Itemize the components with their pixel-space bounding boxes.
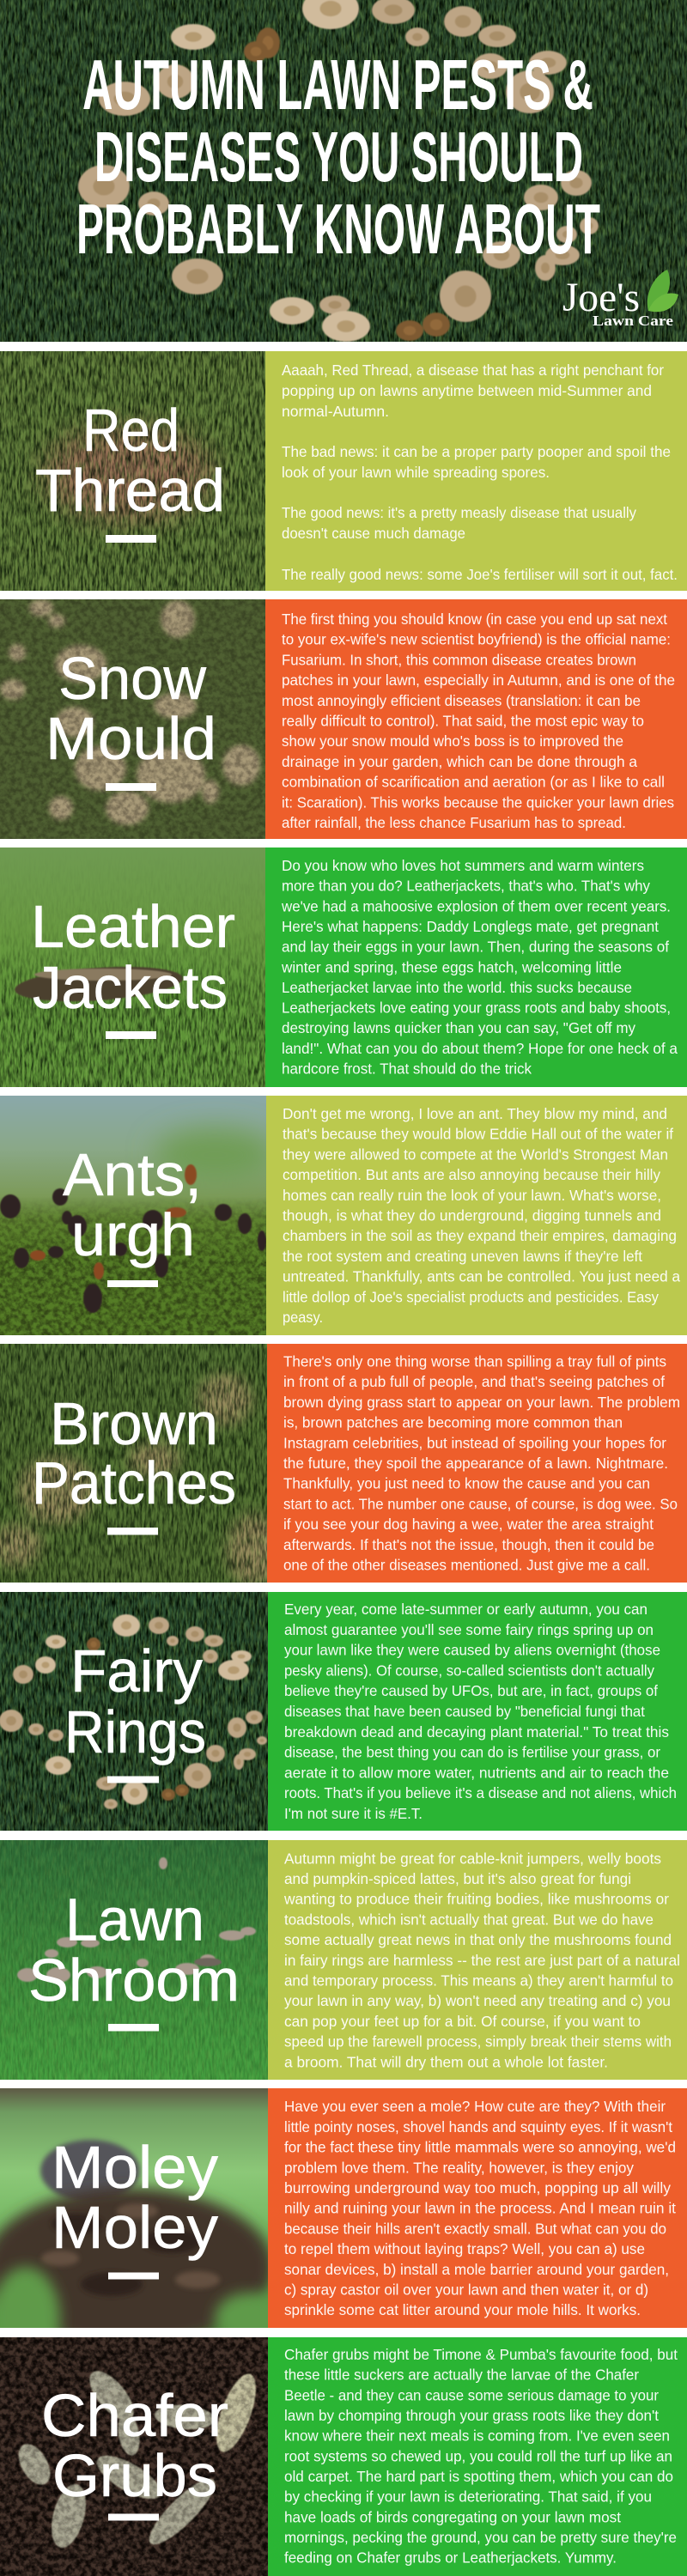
title: Red Thread: Thread — [35, 457, 225, 524]
text panel: most annoyingly efficient diseases (translation: it can be — [282, 692, 641, 709]
text panel: some actually great news in that only the mushrooms found — [284, 1931, 672, 1948]
text panel: Fusarium. In short, this common disease creates brown — [282, 651, 636, 668]
text panel: your lawn like they were caused by aliens overnight (those — [284, 1642, 660, 1659]
text panel: have loads of birds congregating on your lawn most — [284, 2508, 621, 2525]
title: Chafer Grubs — [41, 2382, 228, 2509]
text panel: c) spray castor oil over your lawn and then water it, or d) — [284, 2281, 648, 2298]
text panel: in front of a pub full of people, and that's seeing patches of — [283, 1373, 665, 1390]
title underline bar — [108, 2514, 159, 2521]
text panel — [268, 2337, 687, 2576]
text panel: mornings, pecking the ground, you can be pretty sure they're — [284, 2529, 677, 2546]
title underline bar — [108, 2024, 159, 2032]
text panel: to your ex-wife's new scientist boyfriend) is the official name: — [282, 631, 671, 648]
text panel: diseases that have been caused by "beneficial fungi that — [284, 1703, 645, 1720]
title: Ants, urgh: Ants, — [63, 1141, 202, 1208]
text panel: lawn by chomping through your grass roots like they don't — [284, 2407, 659, 2424]
text panel: show your snow mould who's boss is to improved the — [282, 732, 623, 750]
text panel: more than you do? Leatherjackets, that's who. That's why — [282, 878, 650, 895]
title: Leather Jackets: Jackets — [33, 954, 228, 1021]
title: Snow Mould — [46, 645, 216, 772]
text panel: by checking if your lawn is deteriorating. That said, if you — [284, 2488, 652, 2506]
text panel: pesky aliens). Of course, so-called scientists don't actually — [284, 1662, 654, 1679]
text panel: Leatherjackets love eating your grass roots and baby shoots, — [282, 999, 671, 1017]
text panel: drainage in your garden, which can be done through a — [282, 753, 637, 770]
title: Chafer Grubs: Chafer — [41, 2382, 228, 2449]
logo: Joe's Lawn Care: Lawn Care — [593, 313, 674, 329]
logo: Joe's Lawn Care: Joe's — [562, 275, 640, 320]
title: Fairy Rings: Fairy — [70, 1637, 203, 1704]
text panel: competition. But ants are also annoying because their hilly — [283, 1166, 660, 1183]
title: Leather Jackets — [31, 893, 235, 1021]
text panel: is, brown patches are becoming more common than — [283, 1414, 623, 1431]
text panel: peasy. — [283, 1309, 323, 1326]
text panel: burrowing underground way too much, popping up all willy — [284, 2179, 671, 2196]
photo: ants on a mossy mound — [0, 1096, 275, 1335]
text panel: Don't get me wrong, I love an ant. They blow my mind, and — [283, 1105, 667, 1122]
text panel: roots. That's if you believe it's a disease and not aliens, which — [284, 1784, 677, 1801]
title: Lawn Shroom: Lawn — [65, 1886, 204, 1953]
panel: Brown Patches — [0, 1344, 687, 1586]
text panel: they were allowed to compete at the World's Strongest Man — [283, 1145, 668, 1163]
text panel: if you see your dog having a wee, water the area straight — [283, 1516, 654, 1533]
text panel: problem love them. The reality, however, is they enjoy — [284, 2159, 634, 2176]
title underline bar — [106, 1031, 156, 1039]
text panel: There's only one thing worse than spilling a tray full of pints — [283, 1353, 666, 1370]
text panel: one of the other diseases mentioned. Just give me a call. — [283, 1556, 650, 1573]
panel: Snow Mould — [0, 599, 687, 839]
photo: red thread on grass — [0, 351, 265, 591]
text panel: really difficult to control). That said, the most epic way to — [282, 713, 644, 730]
title: Lawn Shroom: Shroom — [28, 1947, 240, 2014]
text panel: popping up on lawns anytime between mid-Summer and — [282, 382, 652, 399]
text panel: toadstools, which isn't actually that great. But we do have — [284, 1911, 654, 1928]
text panel — [265, 848, 687, 1087]
text panel: these little suckers are actually the larvae of the Chafer — [284, 2366, 639, 2384]
title: Red Thread: Red — [82, 397, 179, 464]
text panel: The first thing you should know (in case you end up sat next — [282, 611, 667, 628]
photo: leatherjacket larva on grass — [0, 848, 265, 1087]
text panel: know where their next meals is coming from. I've even seen — [284, 2427, 670, 2445]
title: Ants, urgh: urgh — [71, 1201, 195, 1268]
text panel: Thankfully, you just need to know the cause and you can — [283, 1475, 650, 1492]
text panel — [265, 351, 687, 591]
text panel — [265, 599, 687, 839]
text panel: combination of scarification and aeration (or as I like to call — [282, 774, 665, 791]
title: Brown Patches: Patches — [32, 1449, 236, 1516]
title: Chafer Grubs: Grubs — [52, 2442, 217, 2509]
text panel — [268, 2088, 687, 2328]
text panel: it: Scaration). This works because the quicker your lawn dries — [282, 793, 674, 811]
panel: Lawn Shroom — [0, 1840, 687, 2080]
text panel: that's because they would blow Eddie Hall out of the water if — [283, 1126, 673, 1143]
title: Moley Moley: Moley — [52, 2194, 218, 2261]
text panel: though, is what they do underground, digging tunnels and — [283, 1207, 661, 1224]
text panel: destroying lawns quicker than you can say, "Get off my — [282, 1019, 635, 1036]
title: Moley Moley — [52, 2134, 218, 2261]
photo: brown patches on grass — [0, 1344, 282, 1586]
text panel — [268, 1592, 687, 1831]
text panel: Chafer grubs might be Timone & Pumba's favourite food, but — [284, 2346, 678, 2363]
text panel: Aaaah, Red Thread, a disease that has a right penchant for — [282, 361, 664, 379]
photo: snow mould patches — [0, 599, 265, 839]
text panel: Here's what happens: Daddy Longlegs mate, get pregnant — [282, 918, 659, 935]
text panel: because their hills aren't exactly small. But what can you do — [284, 2220, 666, 2237]
text panel: winter and spring, these eggs hatch, welcoming little — [281, 958, 622, 975]
text panel: untreated. Thankfully, ants can be controlled. You just need a — [283, 1268, 680, 1285]
title: Red Thread — [35, 397, 225, 524]
text panel: The really good news: some Joe's fertiliser will sort it out, fact. — [282, 566, 678, 583]
title: Ants, urgh — [63, 1141, 202, 1268]
text panel: for the fact these tiny little mammals were so annoying, we'd — [284, 2139, 676, 2156]
text panel: Do you know who loves hot summers and warm winters — [282, 857, 644, 874]
text panel: breakdown dead and decaying plant material." To treat this — [284, 1723, 669, 1741]
text panel: wanting to produce their fruiting bodies, like mushrooms or — [283, 1891, 669, 1908]
photo: fairy ring mushrooms — [0, 1592, 268, 1831]
text panel: a broom. That will dry them out a whole lot faster. — [284, 2053, 608, 2070]
title: Snow Mould: Mould — [46, 705, 216, 772]
text panel: Beetle - and they can cause some serious damage to your — [284, 2386, 659, 2403]
icon: green leaves — [647, 270, 678, 312]
title: Leather Jackets: Leather — [31, 893, 235, 960]
text panel: Instagram celebrities, but instead of spoiling your hopes for — [283, 1434, 666, 1451]
text panel: disease, the best thing you can do is fertilise your grass, or — [284, 1744, 660, 1761]
text panel: patches in your lawn, especially in Autumn, and is one of the — [282, 671, 675, 689]
header photo: fairy ring of mushrooms on grass — [0, 0, 687, 342]
text panel: Have you ever seen a mole? How cute are they? With their — [284, 2098, 666, 2115]
title: Brown Patches — [32, 1390, 236, 1516]
header panel — [0, 0, 687, 342]
panel: Leather Jackets — [0, 848, 687, 1087]
text panel — [268, 1840, 687, 2080]
text panel — [266, 1096, 687, 1335]
text panel: hardcore frost. That should do the trick — [282, 1060, 532, 1077]
title: Moley Moley: Moley — [52, 2134, 218, 2201]
title underline bar — [107, 1528, 158, 1535]
text panel: The good news: it's a pretty measly disease that usually — [282, 504, 636, 521]
text panel: the root system and creating uneven lawns if they're left — [283, 1248, 642, 1265]
text panel: doesn't cause much damage — [282, 525, 465, 542]
text panel: normal-Autumn. — [282, 403, 389, 420]
text panel: brown dying grass start to appear on your lawn. The problem — [283, 1394, 680, 1411]
photo: small mushrooms in blurred lawn — [0, 1840, 268, 2080]
title: Snow Mould: Snow — [58, 645, 206, 712]
text panel: feeding on Chafer grubs or Leatherjackets. Yummy. — [284, 2549, 617, 2567]
panel: Ants, urgh — [0, 1096, 687, 1335]
text panel: can pop your feet up for a bit. Of course, if you want to — [284, 2013, 641, 2030]
text panel: sprinkle some cat litter around your mole hills. It works. — [284, 2301, 641, 2318]
text panel: believe they're caused by UFOs, but are, in fact, groups of — [284, 1682, 658, 1699]
title underline bar — [106, 535, 156, 543]
logo: Joe's Lawn Care — [562, 270, 678, 329]
text panel: Every year, come late-summer or early autumn, you can — [284, 1601, 647, 1618]
text panel: speed up the farewell process, simply break their stems with — [284, 2033, 672, 2050]
text panel: homes can really ruin the look of your lawn. What's worse, — [283, 1187, 661, 1204]
text panel: aerate it to allow more water, nutrients and air to reach the — [284, 1764, 669, 1781]
title underline bar — [107, 1776, 159, 1783]
text panel: land!". What can you do about them? Hope for one heck of a — [282, 1040, 678, 1057]
title underline bar — [107, 1280, 158, 1287]
text panel: little pointy noses, shovel hands and squinty eyes. If it wasn't — [284, 2118, 672, 2136]
text panel: I'm not sure it is #E.T. — [284, 1805, 423, 1822]
text panel: little dollop of Joe's specialist products and pesticides. Easy — [283, 1288, 659, 1305]
photo: mole on molehill — [0, 2088, 268, 2328]
text panel: old carpet. The hard part is spotting them, which you can do — [284, 2468, 673, 2485]
text panel: to repel them without laying traps? Well, you can a) use — [284, 2240, 645, 2257]
text panel: nilly and ruining your lawn in the process. And I mean ruin it — [284, 2200, 676, 2217]
text panel: Autumn might be great for cable-knit jumpers, welly boots — [284, 1850, 661, 1867]
text panel: start to act. The number one cause, of course, is dog wee. So — [283, 1495, 678, 1512]
panel: Fairy Rings — [0, 1592, 687, 1831]
text panel: root systems so chewed up, you could roll the turf up like an — [284, 2447, 672, 2464]
photo: chafer grubs on soil — [0, 2337, 268, 2576]
title underline bar — [106, 783, 156, 791]
panel: Moley Moley — [0, 2088, 687, 2328]
text panel: in fairy rings are harmless -- the rest are just part of a natural — [284, 1952, 680, 1969]
text panel: your lawn in any way, b) won't need any treating and c) you — [284, 1992, 671, 2009]
text panel: chambers in the soil as they expand their empires, damaging — [283, 1227, 677, 1244]
text panel: look of your lawn while spreading spores. — [282, 464, 550, 481]
text panel: after rainfall, the less chance Fusarium has to spread. — [282, 814, 626, 831]
text panel: we've had a mahoosive explosion of them over recent years. — [281, 897, 671, 914]
text panel: and lay their eggs in your lawn. Then, during the seasons of — [282, 939, 669, 956]
title underline bar — [108, 2272, 159, 2279]
text panel: Leatherjacket larvae into the world. this sucks because — [282, 979, 632, 996]
text panel: the future, they spoil the appearance of a lawn. Nightmare. — [283, 1455, 668, 1472]
text panel: sonar devices, b) install a mole barrier around your garden, — [284, 2261, 669, 2278]
text panel: afterwards. If that's not the issue, though, then it could be — [283, 1536, 654, 1553]
title: Brown Patches: Brown — [50, 1390, 218, 1457]
title: Fairy Rings — [64, 1637, 206, 1765]
title: Lawn Shroom — [28, 1886, 240, 2014]
text panel: and temporary process. This means a) they aren't harmful to — [284, 1971, 673, 1989]
main title — [76, 45, 600, 269]
text panel — [267, 1344, 687, 1583]
title: Fairy Rings: Rings — [64, 1698, 206, 1765]
text panel: and pumpkin-spiced lattes, but it's also great for fungi — [284, 1870, 631, 1887]
panel: Red Thread — [0, 351, 687, 591]
panel: Chafer Grubs — [0, 2337, 687, 2576]
text panel: The bad news: it can be a proper party pooper and spoil the — [282, 443, 671, 460]
text panel: almost guarantee you'll see some fairy rings spring up on — [284, 1621, 654, 1638]
